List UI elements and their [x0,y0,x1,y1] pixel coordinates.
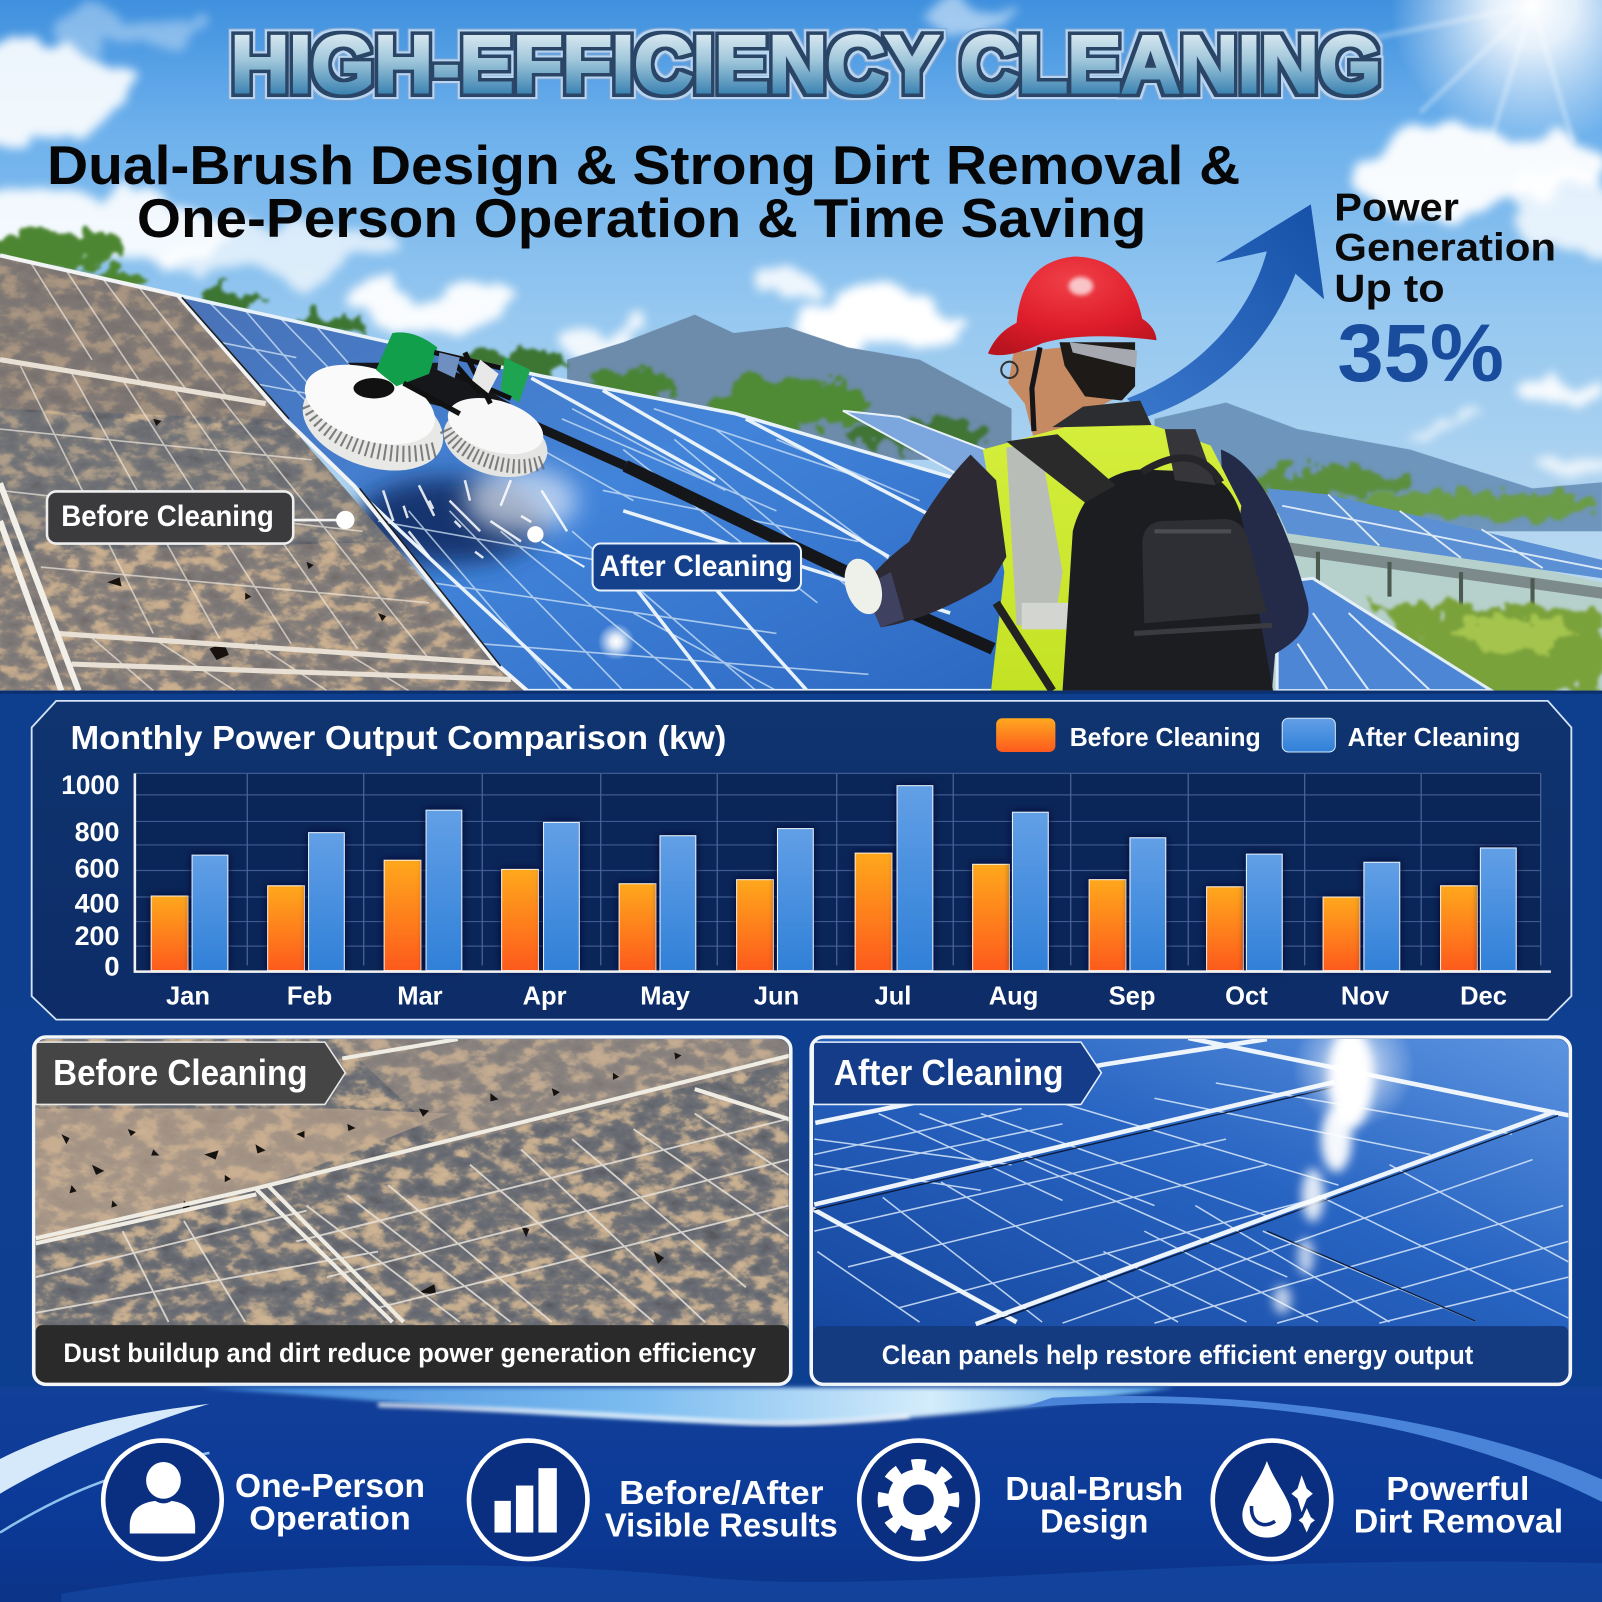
feature: dual-brush design: Dual-Brush [1005,1470,1183,1508]
safety vest [983,425,1241,691]
clean solar panels [178,295,1011,691]
worker [838,256,1309,691]
motor green small [501,358,530,403]
month labels: Oct [1225,982,1268,1010]
helmet [988,256,1157,355]
frame rails [36,1039,791,1322]
feature: one-person operation [103,1441,425,1559]
feature: one-person operation: One-Person [235,1467,425,1505]
dirty solar panels [0,245,541,695]
legend [996,718,1520,752]
feature: before/after visible results: Before/After [619,1474,823,1512]
month labels: May [640,982,691,1010]
clouds [0,0,1602,482]
cell lines [36,1114,789,1322]
tag heading [813,1042,1101,1104]
mountains [567,315,1602,531]
sun glare [1359,0,1602,153]
headline: HIGH-EFFICIENCY CLEANING [231,20,1381,110]
decorative waves [199,1387,1175,1424]
callout: power generation up to 35% [1334,187,1556,399]
y axis labels: 200 [75,921,120,951]
plot area [135,773,1541,971]
feature: before/after visible results [469,1441,838,1559]
month labels: Jul [875,982,911,1010]
subtitle: One-Person Operation & Time Saving [137,187,1146,249]
arrow: power generation up [1127,204,1324,417]
month labels: Apr [523,982,567,1010]
dirt specks [107,419,386,660]
y axis labels: 800 [75,817,120,847]
y axis labels: 1000 [61,770,120,800]
panel: before cleaning photo [34,1037,791,1384]
tag heading [36,1042,345,1104]
head and neck [1008,347,1134,439]
panel: monthly power output chart [32,701,1571,1020]
water splash [383,468,634,660]
callout: power generation up to 35%: Generation [1334,227,1556,270]
cell grime lines [0,263,429,691]
panel frame rails [0,360,511,679]
hero scene background [0,0,1602,705]
tree line [0,232,1599,520]
sun glare on panels [1273,1027,1373,1314]
bars after cleaning [192,786,1516,971]
panel frames [178,295,996,691]
frame rails [812,1038,1570,1324]
brush left [291,350,455,487]
callout: power generation up to 35%: Up to [1334,267,1445,310]
month labels: Aug [989,982,1038,1010]
y axis labels: 0 [104,952,120,982]
cell lines [814,1083,1568,1323]
dual brush head [291,332,993,649]
month labels: Dec [1460,982,1507,1010]
legend: Before Cleaning [1070,724,1261,752]
lower section background [0,691,1602,1602]
month labels: Jun [754,982,799,1010]
pole [480,402,625,466]
legend: After Cleaning [1348,724,1520,752]
y axis labels [61,770,120,982]
y axis labels: 600 [75,854,120,884]
feature: powerful dirt removal [1213,1441,1563,1559]
left arm [863,455,1006,627]
caption strip: Dust buildup and dirt reduce power generation efficiency [63,1338,756,1368]
dirty photo texture [36,1039,789,1330]
feature: one-person operation: Operation [249,1499,411,1537]
callout: power generation up to 35%: Power [1334,187,1459,230]
feature: dual-brush design [859,1441,1183,1559]
caption strip [813,1326,1568,1383]
panel: after cleaning photo [811,1006,1570,1384]
grime speckles [61,1052,681,1294]
caption strip [36,1325,789,1383]
panel cell lines [194,302,920,691]
brush right [435,388,556,488]
subtitle: Dual-Brush Design & Strong Dirt Removal & [47,134,1240,196]
motor green large [376,332,437,386]
right arm [1221,450,1309,691]
collar [1052,400,1152,427]
label: before cleaning hero [47,491,355,544]
caption strip: Clean panels help restore efficient energy output [882,1340,1473,1370]
month labels: Feb [287,982,332,1010]
clean photo panels [813,1039,1568,1330]
callout: power generation up to 35%: 35% [1337,308,1504,399]
month labels: Nov [1341,982,1390,1010]
label: after cleaning hero: After Cleaning [600,550,793,583]
subtitle [47,134,1240,249]
y axis labels: 400 [75,888,120,918]
feature: powerful dirt removal: Dirt Removal [1354,1503,1563,1541]
icon: bar chart [494,1468,557,1533]
label: after cleaning hero [527,526,801,591]
icon: person [130,1462,195,1534]
backpack [996,429,1273,691]
bars before cleaning [151,853,1477,971]
month labels: Sep [1109,982,1155,1010]
label: before cleaning hero: Before Cleaning [61,500,274,533]
feature: dual-brush design: Design [1040,1503,1148,1541]
bottom feature band [0,1386,1602,1602]
icon: water drop with sparkles [1242,1461,1315,1538]
month labels: Jan [166,982,210,1010]
feature: before/after visible results: Visible Results [605,1507,838,1545]
right side solar array and field [843,411,1602,695]
feature: powerful dirt removal: Powerful [1386,1470,1529,1508]
month labels [166,982,1507,1010]
chart title: Monthly Power Output Comparison (kw) [70,719,726,757]
tag heading: Before Cleaning [53,1053,308,1093]
month labels: Mar [397,982,443,1010]
glove [838,554,889,619]
tag heading: After Cleaning [834,1053,1064,1093]
bracket [404,352,511,414]
icon: gear [878,1459,959,1541]
